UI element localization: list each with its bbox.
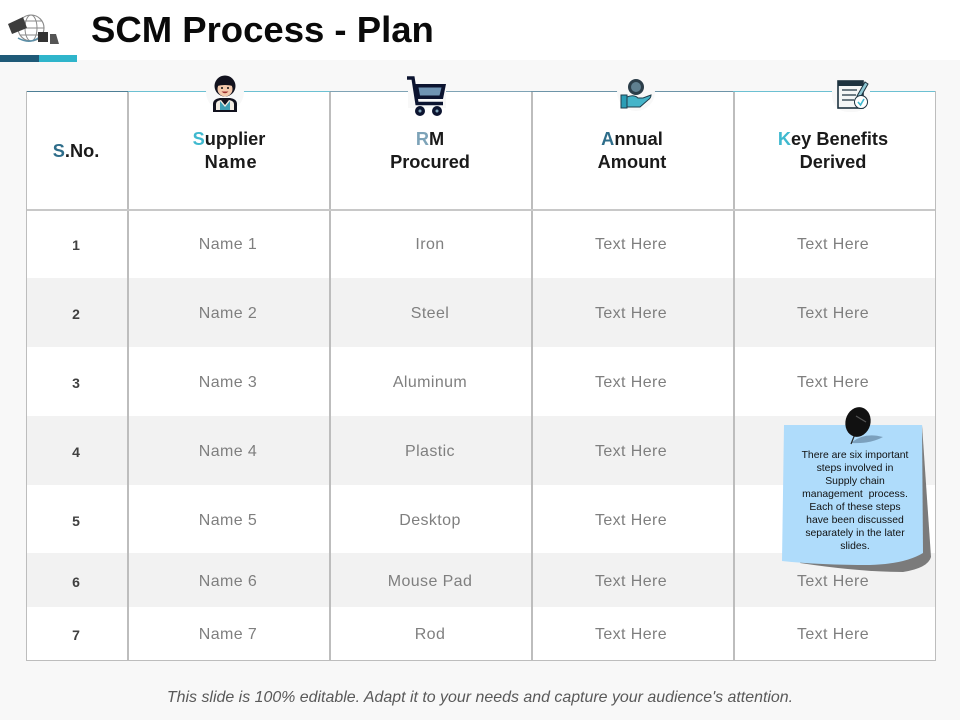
- row 5: Name 5: [199, 512, 257, 529]
- sticky note callout: [782, 407, 931, 572]
- row 5: 5: [72, 513, 80, 529]
- title: SCM Process - Plan: [91, 9, 434, 50]
- row 2: Text Here: [595, 305, 667, 322]
- row 7: Rod: [415, 626, 445, 643]
- note text: There are six important: [802, 450, 908, 461]
- row 1: Text Here: [595, 236, 667, 253]
- row 3: Text Here: [595, 374, 667, 391]
- row 4: 4: [72, 444, 80, 460]
- row 3: Text Here: [797, 374, 869, 391]
- icon: supplier person: [206, 76, 244, 112]
- row 6: Mouse Pad: [388, 573, 472, 590]
- row 4: Name 4: [199, 443, 257, 460]
- table header: RM Procured: Procured: [390, 152, 470, 172]
- note text: Supply chain: [825, 476, 885, 487]
- row 6: Name 6: [199, 573, 257, 590]
- row 1: Text Here: [797, 236, 869, 253]
- row 5: Desktop: [399, 512, 461, 529]
- row 2: Name 2: [199, 305, 257, 322]
- row 6: 6: [72, 574, 80, 590]
- table header: RM Procured: RM: [416, 129, 444, 149]
- row 3: Name 3: [199, 374, 257, 391]
- row 1: 1: [72, 237, 80, 253]
- row 1: [72, 236, 869, 253]
- note paper and pin: [782, 407, 931, 572]
- table header: Annual Amount: Annual: [601, 129, 663, 149]
- row 6: [72, 573, 869, 590]
- row 7: Name 7: [199, 626, 257, 643]
- row 2: 2: [72, 306, 80, 322]
- row 3: 3: [72, 375, 80, 391]
- row 7: 7: [72, 627, 80, 643]
- row 6: Text Here: [595, 573, 667, 590]
- row 2: Text Here: [797, 305, 869, 322]
- table header: Key Benefits Derived: [778, 129, 888, 172]
- row 2: Steel: [411, 305, 449, 322]
- row 6: Text Here: [797, 573, 869, 590]
- row 5: Text Here: [595, 512, 667, 529]
- accent bar: [0, 55, 77, 62]
- row 1: Name 1: [199, 236, 257, 253]
- note text: separately in the later: [805, 528, 905, 539]
- note text: management process.: [802, 489, 908, 500]
- note text: Each of these steps: [809, 502, 901, 513]
- note text: have been discussed: [806, 515, 904, 526]
- row 7: [72, 626, 869, 643]
- table header: Supplier Name: Name: [205, 152, 257, 172]
- table header: S.No.: S.No.: [53, 141, 99, 161]
- table header: Key Benefits Derived: Derived: [800, 152, 866, 172]
- table header: Annual Amount: Amount: [598, 152, 666, 172]
- table header: Supplier Name: Supplier: [193, 129, 265, 149]
- table header: Supplier Name: [193, 129, 266, 172]
- note text: slides.: [840, 541, 870, 552]
- table background: [27, 91, 935, 661]
- icon: clipboard with check: [832, 80, 870, 109]
- header band: [0, 0, 960, 60]
- row 4: Text Here: [595, 443, 667, 460]
- icon: shopping cart: [407, 76, 446, 116]
- icon: hand with coin: [617, 79, 655, 108]
- row 7: Text Here: [595, 626, 667, 643]
- row 7: Text Here: [797, 626, 869, 643]
- row 4: [72, 443, 667, 460]
- row 3: [72, 374, 869, 391]
- row 2: [72, 305, 869, 322]
- row 3: Aluminum: [393, 374, 467, 391]
- table header: RM Procured: [390, 129, 470, 172]
- row 1: Iron: [415, 236, 445, 253]
- note text: [802, 450, 908, 552]
- footer note: This slide is 100% editable. Adapt it to your needs and capture your audience's attention.: [167, 688, 793, 706]
- row 5: [72, 512, 667, 529]
- table header: Key Benefits Derived: Key Benefits: [778, 129, 888, 149]
- row 4: Plastic: [405, 443, 455, 460]
- table header: Annual Amount: [598, 129, 666, 172]
- icon: logistics globe: [8, 14, 59, 44]
- note text: steps involved in: [817, 463, 893, 474]
